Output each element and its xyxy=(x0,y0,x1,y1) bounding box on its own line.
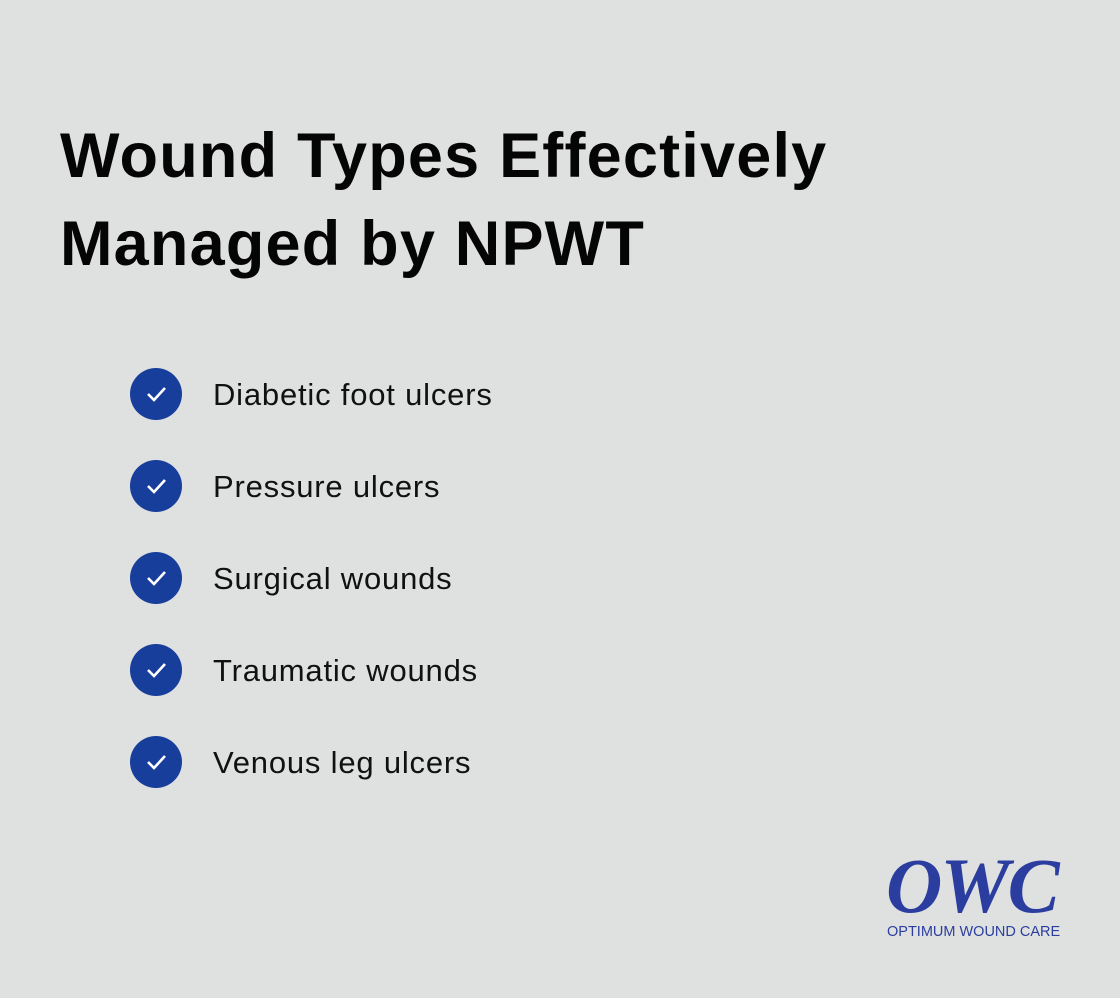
title xyxy=(60,121,827,279)
item: surgical wounds: Surgical wounds xyxy=(213,561,452,596)
logo: OWC xyxy=(886,842,1058,929)
item: venous leg ulcers xyxy=(130,736,471,788)
item: diabetic foot ulcers xyxy=(130,368,493,420)
item: venous leg ulcers: Venous leg ulcers xyxy=(213,745,471,780)
item: traumatic wounds xyxy=(130,644,478,696)
item: surgical wounds xyxy=(130,552,452,604)
item: pressure ulcers: Pressure ulcers xyxy=(213,469,440,504)
title: Wound Types Effectively xyxy=(60,121,827,191)
title: Managed by NPWT xyxy=(60,209,645,279)
item: pressure ulcers xyxy=(130,460,440,512)
item: traumatic wounds: Traumatic wounds xyxy=(213,653,478,688)
logo: OPTIMUM WOUND CARE xyxy=(887,924,1060,940)
item: diabetic foot ulcers: Diabetic foot ulcers xyxy=(213,377,493,412)
